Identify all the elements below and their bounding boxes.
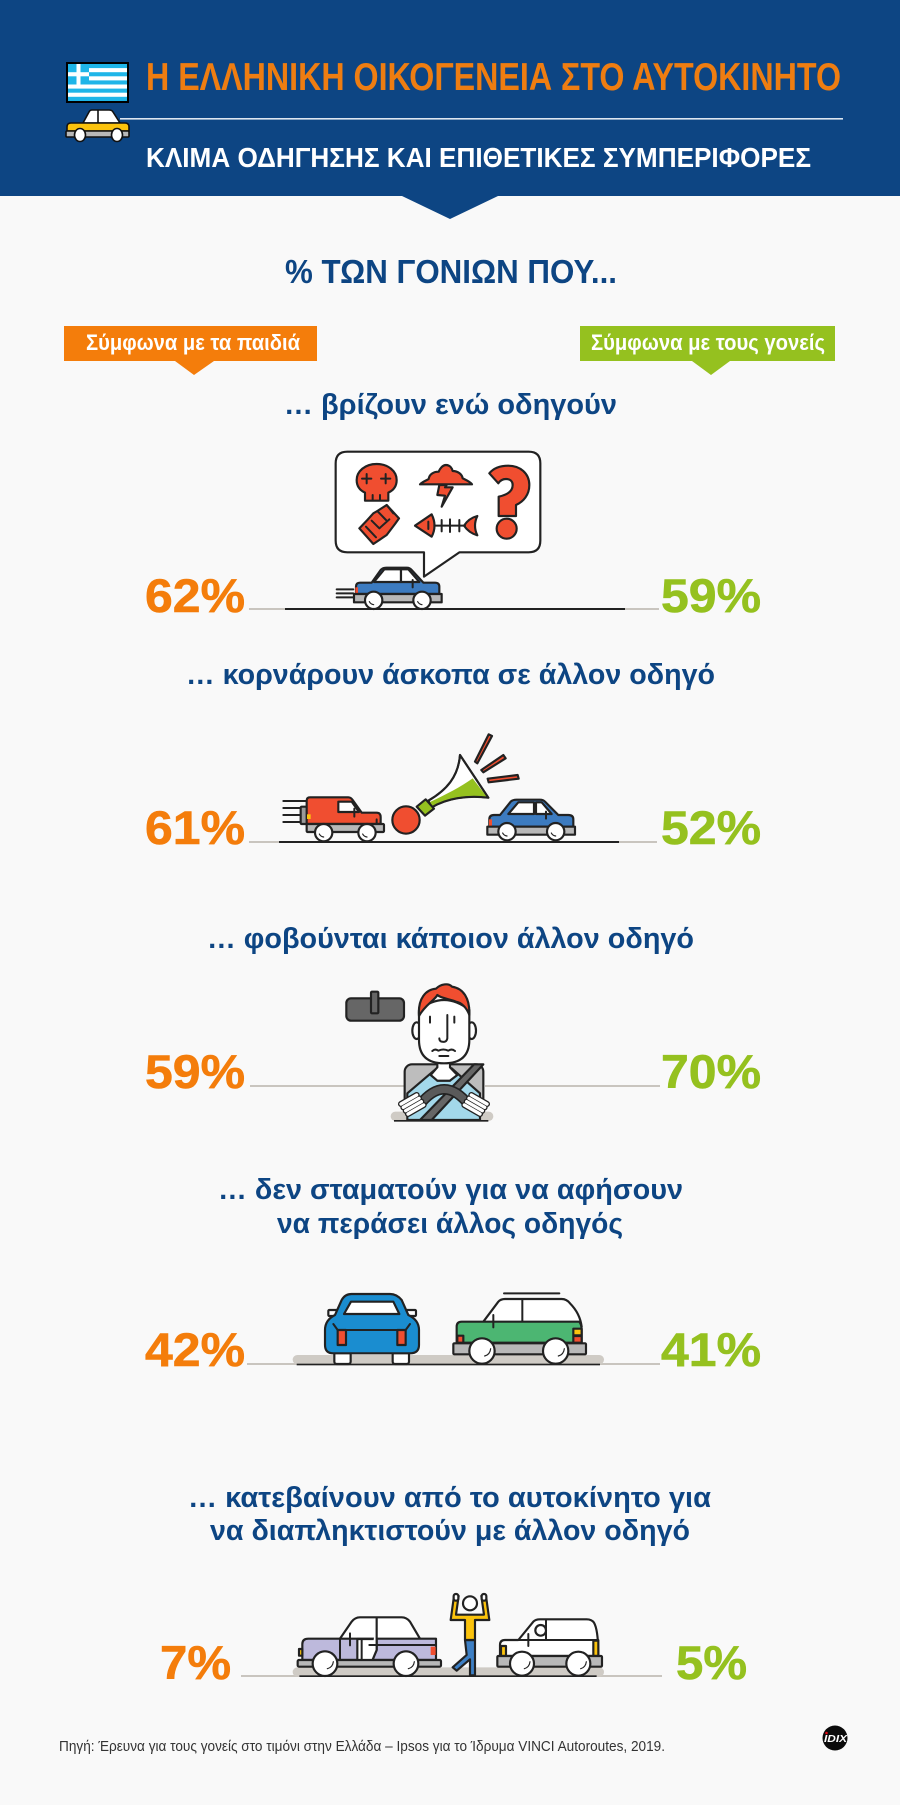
- face: [419, 1000, 469, 1063]
- legend: according to parents: Σύμφωνα με τους γονείς: [591, 330, 825, 355]
- icon: question mark: [489, 466, 529, 539]
- question text: … δεν σταματούν για να αφήσουν: [218, 1174, 683, 1206]
- icon: yellow car: [66, 110, 129, 142]
- question text: να διαπληκτιστούν με άλλον οδηγό: [210, 1515, 690, 1547]
- question text: … κατεβαίνουν από το αυτοκίνητο για: [188, 1482, 711, 1514]
- icon: blue and green cars: [293, 1293, 604, 1365]
- value: children 59%: 59%: [145, 1045, 245, 1098]
- value: parents 41%: 41%: [661, 1323, 761, 1376]
- speech bubble: [336, 452, 540, 577]
- value: parents 52%: 52%: [661, 801, 761, 854]
- question text: … βρίζουν ενώ οδηγούν: [284, 389, 617, 421]
- value: parents 5%: 5%: [676, 1636, 747, 1689]
- icon: storm cloud: [420, 465, 472, 507]
- value: children 42%: 42%: [145, 1323, 245, 1376]
- legend: according to children: [64, 326, 317, 375]
- green car side view: [453, 1293, 586, 1364]
- icon: van, horn and car: [283, 734, 575, 841]
- arguing person: [451, 1594, 489, 1675]
- header background: [0, 0, 900, 219]
- white car: [497, 1619, 602, 1676]
- value: children 62%: 62%: [145, 569, 245, 622]
- icon: fist: [359, 505, 399, 544]
- panel: swear while driving: [145, 389, 761, 622]
- panel: do not stop to let others pass: [145, 1174, 761, 1376]
- value: children 7%: 7%: [160, 1636, 231, 1689]
- question text: [188, 1482, 711, 1547]
- question text: [218, 1174, 683, 1240]
- icon: two cars and arguing person: [293, 1594, 604, 1677]
- purple car: [298, 1617, 441, 1676]
- icon: fish bones: [415, 514, 477, 537]
- question text: να περάσει άλλος οδηγός: [277, 1208, 623, 1240]
- icon: worried driver: [346, 984, 493, 1122]
- icon: skull: [357, 464, 397, 501]
- panel: honk pointlessly: [145, 659, 761, 854]
- icon: car with swearing speech bubble: [336, 452, 540, 609]
- panel: get out of the car to argue: [160, 1482, 747, 1689]
- horn: [392, 734, 519, 834]
- icon: Greek flag: [66, 62, 129, 103]
- value: children 61%: 61%: [145, 801, 245, 854]
- seat belt: [420, 1064, 483, 1120]
- value: parents 59%: 59%: [661, 569, 761, 622]
- icon: IDIX logo: [822, 1726, 848, 1750]
- question text: … κορνάρουν άσκοπα σε άλλον οδηγό: [186, 659, 715, 691]
- legend: according to children: Σύμφωνα με τα παιδιά: [86, 330, 300, 355]
- question text: … φοβούνται κάποιον άλλον οδηγό: [207, 923, 694, 955]
- red van: [283, 797, 384, 841]
- heading: percent of parents: % ΤΩΝ ΓΟΝΙΩΝ ΠΟΥ...: [285, 253, 617, 290]
- blue car: [487, 800, 575, 840]
- hair: [419, 984, 469, 1016]
- panel: header: [0, 0, 900, 219]
- rear-view mirror: [346, 992, 404, 1021]
- subtitle: ΚΛΙΜΑ ΟΔΗΓΗΣΗΣ ΚΑΙ ΕΠΙΘΕΤΙΚΕΣ ΣΥΜΠΕΡΙΦΟΡΕΣ: [146, 142, 811, 173]
- facial features: [430, 1015, 455, 1056]
- ears: [412, 1022, 421, 1039]
- icon: IDIX logo: IDIX: [824, 1733, 848, 1745]
- value: parents 70%: 70%: [661, 1045, 761, 1098]
- left hand: [401, 1095, 424, 1114]
- right hand: [464, 1095, 487, 1114]
- panel: afraid of another driver: [145, 923, 761, 1122]
- legend: according to parents: [580, 326, 835, 375]
- source note: Πηγή: Έρευνα για τους γονείς στο τιμόνι στην Ελλάδα – Ipsos για το Ίδρυμα VINCI Autoroutes, 2019.: [59, 1739, 665, 1755]
- blue car rear view: [325, 1294, 419, 1364]
- steering wheel: [419, 1089, 469, 1105]
- icon: blue car: [337, 568, 442, 609]
